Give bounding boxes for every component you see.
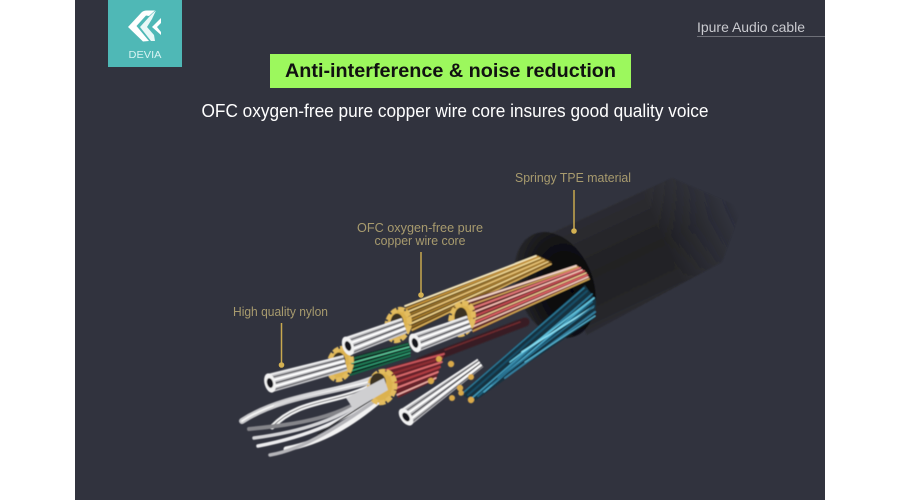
callout: High quality nylon	[233, 305, 328, 368]
callout: Springy TPE material: Springy TPE material	[515, 171, 631, 185]
red wire bundle	[467, 265, 590, 333]
gold ring: red wire	[447, 301, 477, 337]
title banner: Anti-interference & noise reduction	[285, 60, 616, 82]
callout: OFC oxygen-free pure copper wire core	[357, 221, 483, 298]
logo wordmark: DEVIA	[128, 49, 162, 61]
cable illustration	[242, 178, 742, 455]
gold wire bundle	[405, 255, 552, 332]
cable jacket	[514, 179, 728, 338]
wire end cap	[262, 372, 278, 394]
wire end cap	[339, 335, 357, 357]
silver core strands into lower ring	[346, 378, 388, 410]
lower dark red wire bundle	[386, 322, 525, 398]
wire end cap	[406, 332, 424, 354]
silver core 1	[262, 353, 348, 394]
silver core: frayed strands	[242, 376, 388, 455]
silver core 2	[339, 316, 408, 357]
green wire bundle	[350, 342, 410, 376]
gold wire tips	[428, 356, 474, 403]
icon: chevron mark	[128, 10, 161, 42]
callout: OFC oxygen-free pure copper wire core: OFC oxygen-free pure	[357, 221, 483, 235]
silver core 5	[396, 355, 486, 428]
jacket opening	[499, 220, 611, 350]
silver core 3	[406, 314, 473, 354]
callout: High quality nylon: High quality nylon	[233, 305, 328, 319]
gold ring: gold wire	[383, 307, 413, 343]
subtitle: OFC oxygen-free pure copper wire core insures good quality voice	[202, 101, 708, 121]
blue wire bundle	[462, 285, 596, 402]
title banner	[270, 54, 631, 88]
brand logo: DEVIA	[108, 0, 182, 67]
callout: OFC oxygen-free pure copper wire core: copper wire core	[374, 234, 466, 248]
wire end cap	[396, 406, 416, 428]
callout: Springy TPE material	[515, 171, 631, 234]
gold ring: lower red wire	[366, 368, 398, 406]
gold ring: green wire	[325, 346, 355, 382]
product name label: Ipure Audio cable	[697, 19, 805, 35]
